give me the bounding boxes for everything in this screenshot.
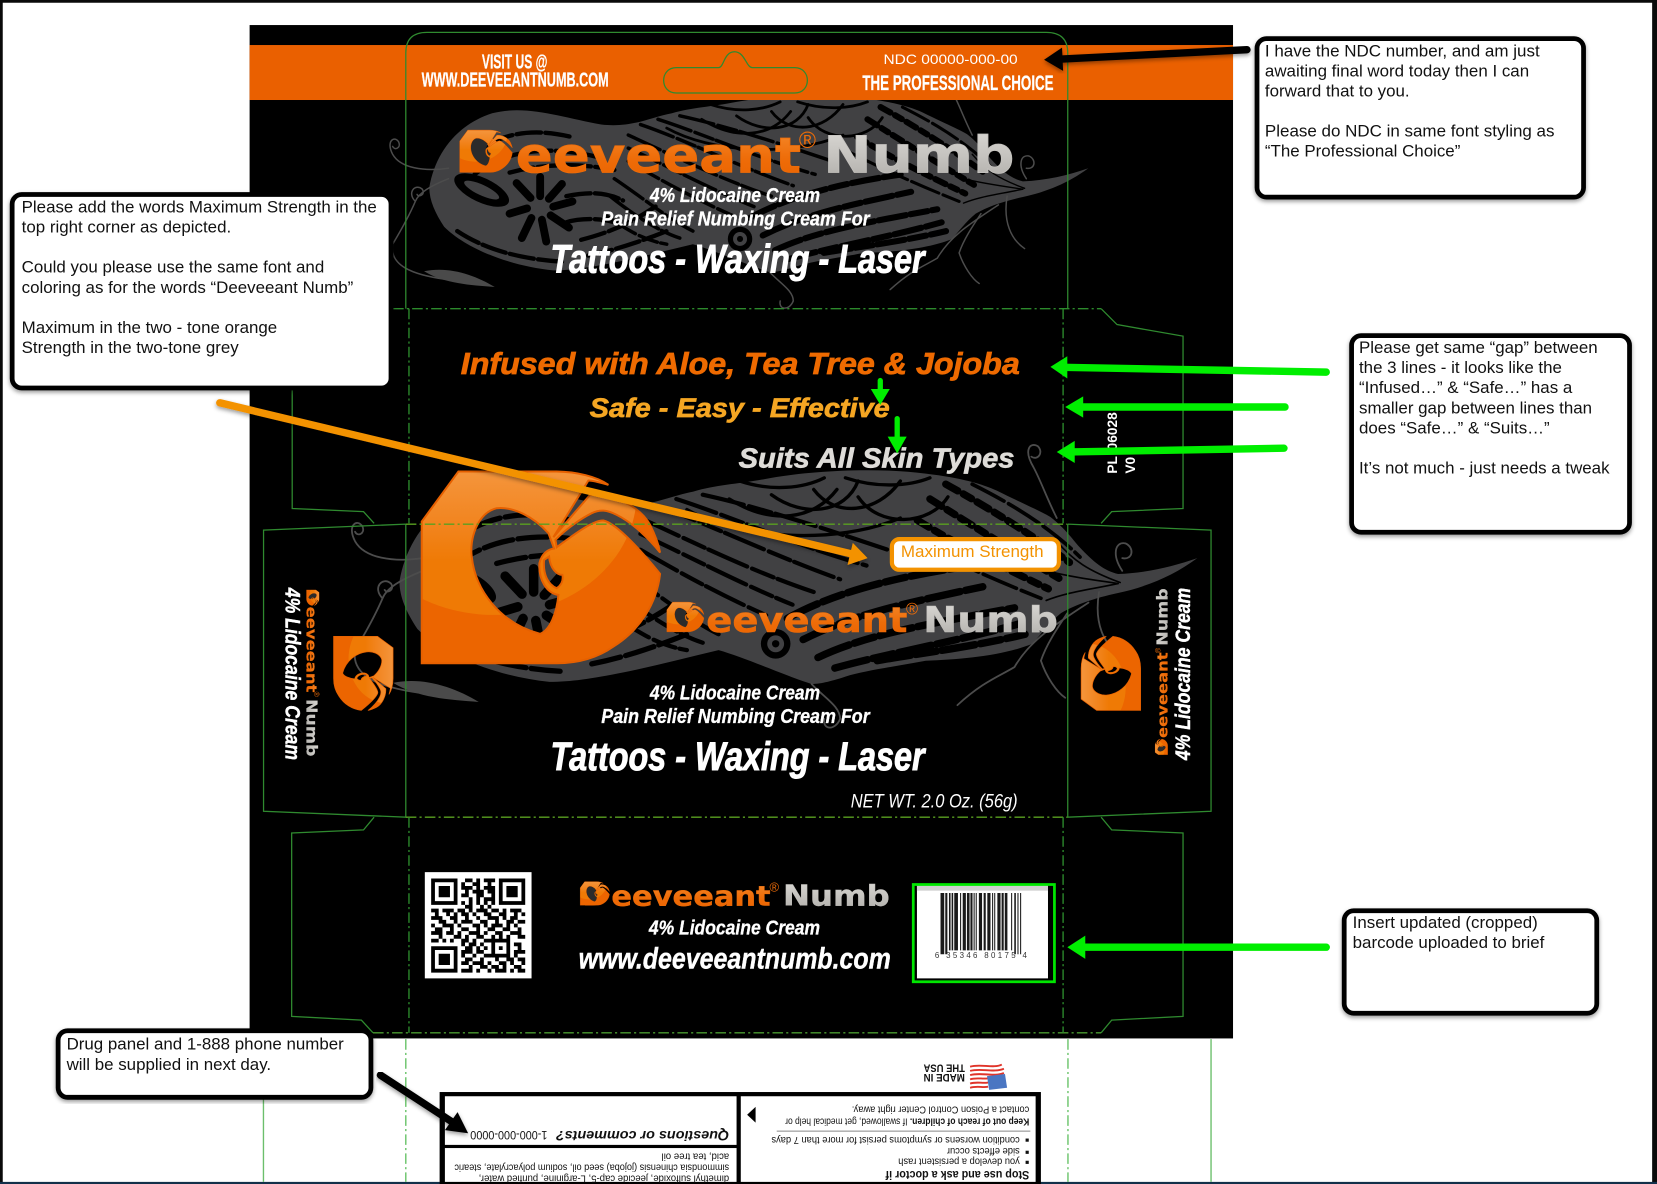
arrow: green to suits line — [1057, 441, 1284, 463]
logo: back panel wordmark: ® — [769, 880, 779, 895]
back panel text — [579, 918, 891, 975]
callout: NDC number: “The Professional Choice” — [1265, 142, 1461, 161]
panel: drug facts box — [440, 1092, 1041, 1184]
callout: line gap: It’s not much - just needs a tweak — [1359, 459, 1610, 478]
top panel product text — [551, 185, 927, 282]
callout: line gap: smaller gap between lines than — [1359, 398, 1592, 417]
dieline: lines below black area — [263, 1039, 1211, 1182]
arrow: black to phone number — [380, 1075, 468, 1133]
arrow: green to infused line — [1050, 356, 1326, 378]
logo: top panel wordmark: eeveeant — [516, 128, 801, 184]
barcode — [913, 885, 1054, 982]
benefit line: suits all skin types: Suits All Skin Types — [739, 442, 1014, 473]
top panel product text: 4% Lidocaine Cream — [649, 185, 820, 207]
callout: Maximum Strength instructions: top right corner as depicted. — [22, 218, 231, 237]
logo: front panel wordmark: eeveeant — [706, 601, 907, 641]
front panel product text: 4% Lidocaine Cream — [649, 682, 820, 704]
net weight text: NET WT. 2.0 Oz. (56g) — [851, 792, 1018, 813]
illustration: feather on top panel — [390, 75, 1088, 308]
illustration: feather on front panel — [352, 445, 1197, 728]
logo: front panel wordmark: Numb — [923, 600, 1058, 641]
callout: NDC number — [1257, 39, 1584, 197]
front panel product text — [551, 682, 927, 779]
benefit line: infused: Infused with Aloe, Tea Tree & Jojoba — [461, 347, 1020, 381]
drug panel: questions line: Questions or comments? — [556, 1127, 729, 1143]
panel: black carton artwork background — [250, 25, 1233, 1038]
header text: visit us: WWW.DEEVEEANTNUMB.COM — [422, 70, 609, 92]
benefit line: safe easy effective: Safe - Easy - Effective — [590, 393, 890, 423]
logo: back panel wordmark: Numb — [783, 879, 890, 912]
orange header band — [250, 45, 1233, 100]
logo: back panel wordmark: D — [583, 881, 605, 912]
header text: visit us: VISIT US @ — [482, 52, 547, 74]
arrow: small green gap arrow one — [871, 381, 890, 405]
drug panel: inactive ingredients — [454, 1150, 729, 1184]
callout: barcode — [1344, 911, 1597, 1013]
arrow: green to safe line — [1065, 396, 1285, 418]
made in the USA text: MADE IN — [924, 1071, 965, 1083]
logo: front panel wordmark: D — [670, 601, 698, 641]
made in the USA flag — [969, 1063, 1007, 1090]
logo: top panel wordmark — [444, 108, 1014, 184]
drug panel: warnings: Keep out of reach of children. If swallowed, get medical help or — [785, 1115, 1029, 1127]
drug panel: warnings: contact a Poison Control Center right away. — [852, 1103, 1029, 1115]
QR code — [425, 872, 532, 978]
front panel product text: Pain Relief Numbing Cream For — [601, 706, 871, 728]
callout: line gap: the 3 lines - it looks like the — [1359, 358, 1562, 377]
logo: top panel wordmark: D — [464, 128, 504, 184]
panel: left side flap: Numb — [302, 699, 320, 757]
panel: left side flap: eeveeant — [302, 607, 319, 692]
drug panel: questions line: 1-000-000-0000 — [470, 1128, 547, 1141]
made in the USA text — [924, 1062, 965, 1083]
callout: NDC number: Please do NDC in same font styling as — [1265, 122, 1554, 141]
callout: NDC number: forward that to you. — [1265, 82, 1410, 101]
plate code text: 06028 — [1105, 412, 1120, 450]
logo: large D mark — [350, 372, 660, 663]
made in the USA text: THE USA — [924, 1062, 965, 1074]
logo: top panel wordmark: ® — [799, 127, 816, 153]
panel: right side flap: 4% Lidocaine Cream — [1172, 588, 1195, 761]
callout: Maximum Strength instructions: Could you please use the same font and — [22, 258, 324, 277]
logo: front panel wordmark — [656, 587, 1058, 641]
header text: NDC and professional choice: THE PROFESSIONAL CHOICE — [862, 72, 1054, 95]
callout: Maximum Strength instructions: Please add the words Maximum Strength in the — [22, 197, 377, 216]
arrow: small green gap arrow two — [888, 419, 907, 454]
panel: left side flap: 4% Lidocaine Cream — [280, 587, 303, 760]
callout: NDC number: awaiting final word today then I can — [1265, 62, 1529, 81]
top panel product text: Pain Relief Numbing Cream For — [601, 209, 871, 231]
plate code text — [1105, 412, 1138, 474]
arrow: black to NDC — [1044, 48, 1247, 71]
callout: NDC number: I have the NDC number, and am just — [1265, 42, 1540, 61]
drug panel: warnings: condition worsens or symptoms persist for more than 7 days — [771, 1134, 1020, 1146]
header text: NDC and professional choice: NDC 00000-000-00 — [883, 52, 1018, 68]
drug panel: warnings: Stop use and ask a doctor if — [885, 1168, 1029, 1181]
highlight: Maximum Strength box: Maximum Strength — [901, 542, 1044, 561]
barcode: 6 35346 80175 4 — [935, 951, 1027, 960]
callout: line gap: Please get same “gap” between — [1359, 338, 1598, 357]
callout: line gap — [1352, 336, 1630, 532]
dieline: top tab and hang hole — [406, 32, 1068, 309]
callout: barcode: barcode uploaded to brief — [1353, 933, 1545, 952]
drug panel: inactive ingredients: simmondsia chinensis (jojoba) seed oil, sodium polyacrylate, stearic — [454, 1161, 729, 1173]
panel: right side flap: D — [1155, 741, 1172, 754]
drug panel: inactive ingredients: acid, tea tree oil — [662, 1150, 729, 1162]
panel: left side flap: ® — [312, 692, 320, 698]
callout: Maximum Strength instructions — [12, 195, 391, 388]
callout: drug panel: will be supplied in next day. — [66, 1055, 271, 1074]
drug panel: warnings — [747, 1103, 1030, 1181]
callout: Maximum Strength instructions: Strength in the two-tone grey — [22, 338, 239, 357]
logo: back panel wordmark: eeveeant — [611, 881, 771, 912]
panel: right side flap: eeveeant — [1155, 652, 1172, 738]
drug panel: warnings: you develop a persistent rash — [898, 1156, 1020, 1168]
header text: visit us — [422, 52, 609, 92]
arrow: orange to Maximum Strength — [220, 403, 868, 565]
plate code text: V0 — [1123, 456, 1138, 474]
dieline: fold lines — [373, 309, 1101, 1033]
callout: drug panel: Drug panel and 1-888 phone number — [67, 1035, 344, 1054]
logo: front panel wordmark: ® — [906, 601, 918, 619]
callout: line gap: does “Safe…” & “Suits…” — [1359, 418, 1550, 437]
drug panel: questions line — [470, 1127, 729, 1143]
back panel text: 4% Lidocaine Cream — [648, 918, 820, 940]
callout: drug panel — [58, 1031, 371, 1097]
callout: Maximum Strength instructions: coloring as for the words “Deeveeant Numb” — [22, 278, 354, 297]
plate code text: PL — [1105, 456, 1120, 474]
panel: left side flap — [280, 585, 424, 760]
callout: Maximum Strength instructions: Maximum in the two - tone orange — [22, 318, 277, 337]
front panel product text: Tattoos - Waxing - Laser — [551, 734, 927, 779]
logo: back panel wordmark — [571, 869, 890, 912]
callout: line gap: “Infused…” & “Safe…” has a — [1359, 378, 1573, 397]
panel: left side flap: D — [302, 591, 319, 603]
panel: right side flap: Numb — [1154, 588, 1172, 646]
panel: right side flap — [1050, 588, 1195, 761]
top panel product text: Tattoos - Waxing - Laser — [551, 237, 927, 282]
logo: top panel wordmark: Numb — [823, 125, 1014, 184]
highlight: Maximum Strength box — [892, 539, 1059, 570]
dieline: flaps — [264, 309, 1211, 1033]
callout: barcode: Insert updated (cropped) — [1353, 913, 1538, 932]
arrow: green to barcode — [1067, 936, 1326, 959]
header text: NDC and professional choice — [862, 52, 1054, 95]
drug panel: warnings: side effects occur — [946, 1145, 1020, 1157]
back panel text: www.deeveeantnumb.com — [579, 942, 891, 975]
panel: right side flap: ® — [1154, 647, 1162, 653]
